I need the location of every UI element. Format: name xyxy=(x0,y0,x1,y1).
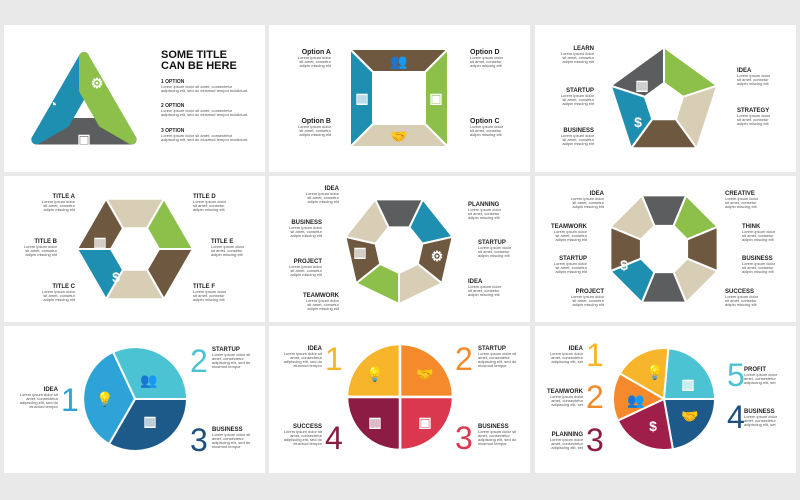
heptagon labels: Lorem ipsum dolor xyxy=(306,298,340,303)
hexagon labels: adipin miscing elit xyxy=(211,252,243,257)
pie 4 labels and numbers: eiusmod tempor xyxy=(478,441,507,446)
heptagon labels: Lorem ipsum dolor xyxy=(468,207,502,212)
pie 3 labels and numbers: eiusmod tempor xyxy=(29,404,59,409)
option labels: adipin miscing elit xyxy=(470,63,502,68)
heptagon labels: PROJECT xyxy=(294,259,322,265)
pie 4 labels and numbers: 2 xyxy=(455,341,473,377)
pie 5 labels and numbers xyxy=(547,337,778,458)
pentagon labels: sit amet, consetur xyxy=(737,117,769,122)
hexagon labels: TITLE E xyxy=(211,239,233,245)
hexagon labels: Lorem ipsum dolor xyxy=(24,244,58,249)
hexagon labels: Lorem ipsum dolor xyxy=(42,199,76,204)
heptagon labels: adipin miscing elit xyxy=(307,199,340,204)
pie 3 labels and numbers: adipiscing elit, sed do xyxy=(212,360,251,365)
pie 5 labels and numbers: amet, consectetur xyxy=(744,376,776,381)
pie 4 labels and numbers: adipiscing elit, sed do xyxy=(284,359,323,364)
hexagon labels: sit amet, consetur xyxy=(193,293,225,298)
octagon labels: Lorem ipsum dolor xyxy=(725,294,759,299)
panel: heptagon cycle xyxy=(289,186,512,311)
hexagon labels: sit amet, consetur xyxy=(43,203,76,208)
octagon labels: sit amet, consetur xyxy=(572,200,605,205)
pie 5 labels and numbers: adipiscing elit, set xyxy=(744,380,776,385)
option labels: sit amet, consetur xyxy=(470,128,502,133)
square diagram xyxy=(350,49,448,147)
heptagon diagram xyxy=(345,199,453,304)
option labels: Lorem ipsum dolor xyxy=(298,124,332,129)
heptagon labels: adipin miscing elit xyxy=(290,233,323,238)
pentagon labels: sit amet, consetur xyxy=(562,97,595,102)
pie 5 labels and numbers: adipiscing elit, set xyxy=(551,402,584,407)
heptagon labels: BUSINESS xyxy=(291,220,322,226)
heptagon labels: sit amet, consetur xyxy=(478,249,510,254)
options list: Lorem ipsum dolor sit amet, consectetur xyxy=(161,108,233,113)
pie chart 5: 🤝 xyxy=(681,408,699,424)
pie 4 labels and numbers: Lorem ipsum dolor sit xyxy=(478,351,517,356)
pie 3 labels and numbers: IDEA xyxy=(44,387,59,393)
octagon labels: adipin miscing elit xyxy=(572,302,605,307)
options list: 2 OPTION xyxy=(161,103,185,109)
heptagon labels: Lorem ipsum dolor xyxy=(289,225,323,230)
options list: Lorem ipsum dolor sit amet, consectetur xyxy=(161,84,233,89)
square diagram: 👥 xyxy=(390,53,408,70)
option labels xyxy=(298,49,504,137)
hexagon labels: adipin miscing elit xyxy=(25,252,58,257)
pentagon labels: Lorem ipsum dolor xyxy=(561,133,595,138)
option labels: Lorem ipsum dolor xyxy=(470,55,504,60)
heptagon labels: IDEA xyxy=(468,279,483,285)
heptagon labels: Lorem ipsum dolor xyxy=(306,191,340,196)
pie 5 labels and numbers: adipiscing elit, set xyxy=(744,422,776,427)
panel: square cycle xyxy=(298,49,504,147)
pentagon labels: STRATEGY xyxy=(737,108,769,114)
octagon labels: TEAMWORK xyxy=(551,224,588,230)
octagon labels: Lorem ipsum dolor xyxy=(571,294,605,299)
pie chart 5 xyxy=(613,348,715,450)
pie 4 labels and numbers: adipiscing elit, sed do xyxy=(284,437,323,442)
pie 4 labels and numbers: 1 xyxy=(325,341,343,377)
octagon labels: adipin miscing elit xyxy=(572,204,605,209)
option labels: Option D xyxy=(470,49,500,56)
panel: four-part pie xyxy=(284,341,517,456)
triangle diagram xyxy=(36,57,132,148)
pie 4 labels and numbers: adipiscing elit, sed do xyxy=(478,359,517,364)
pentagon labels: BUSINESS xyxy=(563,128,594,134)
pentagon labels: adipin miscing elit xyxy=(562,101,595,106)
heptagon labels: Lorem ipsum dolor xyxy=(478,245,512,250)
pentagon labels: Lorem ipsum dolor xyxy=(561,51,595,56)
octagon labels: CREATIVE xyxy=(725,191,755,197)
pie 3 labels and numbers: Lorem ipsum dolor sit xyxy=(212,432,251,437)
pie 5 labels and numbers: Lorem ipsum dolor xyxy=(550,394,584,399)
pie 5 labels and numbers: adipiscing elit, set xyxy=(551,359,584,364)
pie chart 3: 💡 xyxy=(96,391,114,408)
hexagon labels: TITLE C xyxy=(52,284,76,290)
pie 5 labels and numbers: amet, consectetur xyxy=(744,418,776,423)
hexagon diagram xyxy=(77,199,193,299)
pentagon labels: Lorem ipsum dolor xyxy=(737,113,771,118)
option labels: adipin miscing elit xyxy=(470,132,502,137)
pie 5 labels and numbers: TEAMWORK xyxy=(547,389,584,395)
panel: five-part pie xyxy=(547,337,778,458)
heptagon labels: sit amet, consetur xyxy=(468,288,500,293)
pie 5 labels and numbers: 4 xyxy=(727,399,745,435)
hexagon labels: Lorem ipsum dolor xyxy=(193,289,227,294)
option labels: Lorem ipsum dolor xyxy=(298,55,332,60)
octagon labels: adipin miscing elit xyxy=(742,237,774,242)
pie 4 labels and numbers: eiusmod tempor xyxy=(293,441,323,446)
pie 5 labels and numbers: 3 xyxy=(586,422,604,458)
hexagon labels: adipin miscing elit xyxy=(193,297,225,302)
pie 4 labels and numbers: 4 xyxy=(325,420,343,456)
pie 3 labels and numbers: amet, consectetur xyxy=(212,356,244,361)
pentagon labels: sit amet, consetur xyxy=(737,77,769,82)
octagon diagram xyxy=(610,195,718,303)
hexagon labels: sit amet, consetur xyxy=(193,203,225,208)
pie 4 labels and numbers: amet, consectetur xyxy=(478,355,510,360)
pie 5 labels and numbers: IDEA xyxy=(569,346,584,352)
pie 4 labels and numbers: IDEA xyxy=(308,346,323,352)
octagon labels: sit amet, consetur xyxy=(555,233,588,238)
hexagon labels: sit amet, consetur xyxy=(211,248,243,253)
pie 5 labels and numbers: Lorem ipsum dolor xyxy=(744,414,778,419)
square diagram: 🤝 xyxy=(390,128,408,144)
pie 5 labels and numbers: 5 xyxy=(727,357,745,393)
pie 5 labels and numbers: 2 xyxy=(586,379,604,415)
pie 4 labels and numbers: Lorem ipsum dolor sit xyxy=(478,429,517,434)
pentagon labels: adipin miscing elit xyxy=(562,141,595,146)
octagon labels: adipin miscing elit xyxy=(742,269,774,274)
panel: three-part pie xyxy=(20,343,251,458)
hexagon diagram: $ xyxy=(112,269,120,285)
hexagon labels: Lorem ipsum dolor xyxy=(193,199,227,204)
heptagon labels xyxy=(289,186,512,311)
pie 4 labels and numbers: BUSINESS xyxy=(478,424,509,430)
pie 3 labels and numbers: adipiscing elit, sed do xyxy=(212,440,251,445)
octagon labels: adipin miscing elit xyxy=(725,302,757,307)
hexagon labels: Lorem ipsum dolor xyxy=(42,289,76,294)
octagon labels: Lorem ipsum dolor xyxy=(725,196,759,201)
pie 4 labels and numbers: adipiscing elit, sed do xyxy=(478,437,517,442)
pentagon diagram: $ xyxy=(634,114,642,130)
octagon labels: Lorem ipsum dolor xyxy=(742,261,776,266)
pie 4 labels and numbers: STARTUP xyxy=(478,346,506,352)
pie 4 labels and numbers: eiusmod tempor xyxy=(478,363,507,368)
octagon labels: adipin miscing elit xyxy=(555,237,588,242)
option labels: sit amet, consetur xyxy=(299,59,332,64)
octagon labels: PROJECT xyxy=(576,289,604,295)
heptagon labels: sit amet, consetur xyxy=(290,268,323,273)
pentagon labels: adipin miscing elit xyxy=(737,121,769,126)
pie chart 3 xyxy=(83,347,187,451)
heptagon labels: Lorem ipsum dolor xyxy=(468,284,502,289)
hexagon labels: TITLE B xyxy=(34,239,58,245)
hexagon labels: TITLE F xyxy=(193,284,215,290)
octagon labels: THINK xyxy=(742,224,761,230)
panel: triangle cycle xyxy=(36,49,248,148)
pentagon labels: STARTUP xyxy=(566,88,594,94)
pie chart 4: 💡 xyxy=(366,366,384,383)
pie 5 labels and numbers: BUSINESS xyxy=(744,409,775,415)
pie 4 labels and numbers: amet, consectetur xyxy=(290,433,323,438)
option labels: adipin miscing elit xyxy=(299,132,332,137)
octagon labels: SUCCESS xyxy=(725,289,754,295)
pie 5 labels and numbers: Lorem ipsum dolor xyxy=(550,351,584,356)
pie chart 5: 👥 xyxy=(627,392,645,409)
octagon labels: Lorem ipsum dolor xyxy=(554,229,588,234)
octagon labels: Lorem ipsum dolor xyxy=(742,229,776,234)
pie 3 labels and numbers: adipiscing elit, sed do xyxy=(20,400,59,405)
octagon labels: Lorem ipsum dolor xyxy=(571,196,605,201)
option labels: Option C xyxy=(470,118,500,125)
option labels: sit amet, consetur xyxy=(470,59,502,64)
octagon labels: IDEA xyxy=(590,191,605,197)
octagon labels xyxy=(551,191,776,307)
pie 3 labels and numbers: Lorem ipsum dolor sit xyxy=(20,392,59,397)
pie 4 labels and numbers xyxy=(284,341,517,456)
triangle diagram: ⚙ xyxy=(91,75,103,91)
heptagon labels: adipin miscing elit xyxy=(468,215,500,220)
heptagon labels: TEAMWORK xyxy=(303,293,340,299)
heptagon labels: sit amet, consetur xyxy=(290,229,323,234)
pie 4 labels and numbers: 3 xyxy=(455,420,473,456)
pentagon labels: sit amet, consetur xyxy=(562,137,595,142)
pie 4 labels and numbers: SUCCESS xyxy=(293,424,322,430)
option labels: sit amet, consetur xyxy=(299,128,332,133)
pentagon labels: sit amet, consetur xyxy=(562,55,595,60)
heptagon labels: sit amet, consetur xyxy=(307,195,340,200)
octagon labels: adipin miscing elit xyxy=(725,204,757,209)
octagon labels: sit amet, consetur xyxy=(742,233,774,238)
pie 5 labels and numbers: amet, consectetur xyxy=(551,398,584,403)
options list: Lorem ipsum dolor sit amet, consectetur xyxy=(161,133,233,138)
pie chart 3: ▥ xyxy=(143,413,157,429)
pie 4 labels and numbers: amet, consectetur xyxy=(478,433,510,438)
options list: adipiscing elit, sed do eiusmod tempor incididunt. xyxy=(161,112,248,117)
pie chart 3: 👥 xyxy=(140,372,158,389)
pie 3 labels and numbers: BUSINESS xyxy=(212,427,243,433)
pentagon labels: Lorem ipsum dolor xyxy=(561,93,595,98)
heptagon diagram: ▥ xyxy=(353,244,367,260)
pie 3 labels and numbers: 2 xyxy=(190,343,208,379)
pentagon labels: adipin miscing elit xyxy=(562,59,595,64)
panel: hexagon cycle xyxy=(24,194,245,302)
heptagon labels: Lorem ipsum dolor xyxy=(289,264,323,269)
octagon labels: sit amet, consetur xyxy=(555,265,588,270)
heptagon labels: STARTUP xyxy=(478,240,506,246)
heptagon labels: sit amet, consetur xyxy=(468,211,500,216)
pentagon diagram xyxy=(611,47,717,148)
pie chart 4 xyxy=(347,344,453,450)
hexagon labels: adipin miscing elit xyxy=(43,207,76,212)
pie 3 labels and numbers: 3 xyxy=(190,422,208,458)
pentagon labels: IDEA xyxy=(737,68,752,74)
pentagon labels: LEARN xyxy=(573,46,594,52)
square diagram: ▣ xyxy=(429,90,443,106)
option labels: Lorem ipsum dolor xyxy=(470,124,504,129)
option labels: adipin miscing elit xyxy=(299,63,332,68)
octagon labels: Lorem ipsum dolor xyxy=(554,261,588,266)
pie 5 labels and numbers: Lorem ipsum dolor xyxy=(744,372,778,377)
pie 3 labels and numbers: Lorem ipsum dolor sit xyxy=(212,352,251,357)
octagon labels: sit amet, consetur xyxy=(725,200,757,205)
hexagon labels: adipin miscing elit xyxy=(193,207,225,212)
hexagon labels: Lorem ipsum dolor xyxy=(211,244,245,249)
hexagon labels xyxy=(24,194,245,302)
hexagon labels: sit amet, consetur xyxy=(25,248,58,253)
pie 5 labels and numbers: adipiscing elit, set xyxy=(551,445,584,450)
pie 4 labels and numbers: eiusmod tempor xyxy=(293,363,323,368)
hexagon labels: TITLE D xyxy=(193,194,216,200)
triangle diagram: ◔ xyxy=(49,96,57,112)
heptagon labels: IDEA xyxy=(325,186,340,192)
pie 4 labels and numbers: amet, consectetur xyxy=(290,355,323,360)
option labels: Option B xyxy=(301,118,331,125)
pie 3 labels and numbers: eiusmod tempor xyxy=(212,444,241,449)
pie 3 labels and numbers: amet, consectetur xyxy=(212,436,244,441)
title: CAN BE HERE xyxy=(161,60,237,72)
options list xyxy=(161,79,248,142)
octagon labels: adipin miscing elit xyxy=(555,269,588,274)
pie chart 5: ▥ xyxy=(681,376,695,392)
pie 3 labels and numbers: 1 xyxy=(61,382,79,418)
option labels: Option A xyxy=(302,49,331,56)
title: SOME TITLE xyxy=(161,49,227,61)
pie 3 labels and numbers xyxy=(20,343,251,458)
hexagon diagram: ▥ xyxy=(93,234,107,250)
pie 5 labels and numbers: Lorem ipsum dolor xyxy=(550,437,584,442)
pie 3 labels and numbers: amet, consectetur xyxy=(26,396,59,401)
pie 3 labels and numbers: STARTUP xyxy=(212,347,240,353)
panel: pentagon cycle xyxy=(561,46,771,148)
pie 5 labels and numbers: PROFIT xyxy=(744,367,766,373)
pie 3 labels and numbers: eiusmod tempor xyxy=(212,364,241,369)
octagon diagram: $ xyxy=(620,257,628,273)
pie 4 labels and numbers: Lorem ipsum dolor sit xyxy=(284,429,323,434)
options list: 3 OPTION xyxy=(161,128,185,134)
pie chart 4: ▣ xyxy=(418,414,432,430)
triangle diagram: ▣ xyxy=(77,131,91,147)
octagon labels: BUSINESS xyxy=(742,256,773,262)
pie chart 4: ▥ xyxy=(368,414,382,430)
hexagon labels: adipin miscing elit xyxy=(43,297,76,302)
options list: adipiscing elit, sed do eiusmod tempor incididunt. xyxy=(161,137,248,142)
options list: 1 OPTION xyxy=(161,79,185,85)
heptagon labels: adipin miscing elit xyxy=(290,272,323,277)
title xyxy=(161,49,237,72)
pie 5 labels and numbers: amet, consectetur xyxy=(551,355,584,360)
panel: octagon cycle xyxy=(551,191,776,307)
octagon labels: sit amet, consetur xyxy=(572,298,605,303)
pie chart 5: 💡 xyxy=(646,364,664,381)
octagon labels: sit amet, consetur xyxy=(725,298,757,303)
hexagon labels: TITLE A xyxy=(53,194,76,200)
octagon labels: STARTUP xyxy=(559,256,587,262)
pentagon labels xyxy=(561,46,771,146)
heptagon labels: PLANNING xyxy=(468,202,500,208)
heptagon labels: adipin miscing elit xyxy=(468,292,500,297)
pie chart 5: $ xyxy=(649,418,657,434)
pentagon diagram: ▥ xyxy=(635,77,649,93)
heptagon labels: sit amet, consetur xyxy=(307,302,340,307)
pentagon labels: adipin miscing elit xyxy=(737,81,769,86)
octagon labels: sit amet, consetur xyxy=(742,265,774,270)
pie 4 labels and numbers: Lorem ipsum dolor sit xyxy=(284,351,323,356)
square diagram: ▥ xyxy=(355,90,369,106)
heptagon diagram: ⚙ xyxy=(431,248,443,264)
heptagon labels: adipin miscing elit xyxy=(307,306,340,311)
pie 5 labels and numbers: amet, consectetur xyxy=(551,441,584,446)
heptagon labels: adipin miscing elit xyxy=(478,253,510,258)
options list: adipiscing elit, sed do eiusmod tempor incididunt. xyxy=(161,88,248,93)
hexagon labels: sit amet, consetur xyxy=(43,293,76,298)
pie chart 4: 🤝 xyxy=(416,366,434,382)
pentagon labels: Lorem ipsum dolor xyxy=(737,73,771,78)
pie 5 labels and numbers: PLANNING xyxy=(552,432,583,438)
pie 5 labels and numbers: 1 xyxy=(586,337,604,373)
